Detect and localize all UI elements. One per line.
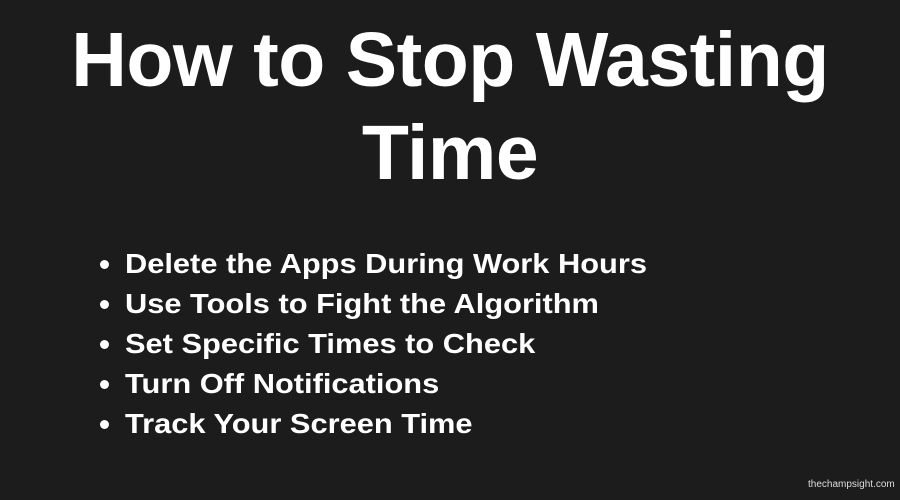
bullet list: Use Tools to Fight the Algorithm [125, 288, 599, 319]
title: How to Stop Wasting [71, 17, 829, 103]
bullet list: Set Specific Times to Check [125, 328, 535, 359]
bullet list: Track Your Screen Time [125, 408, 473, 439]
bullet list [100, 248, 647, 439]
watermark: thechampsight.com [808, 479, 895, 490]
bullet list: Turn Off Notifications [125, 368, 439, 399]
title [71, 17, 829, 196]
title: Time [362, 110, 538, 196]
bullet list: Delete the Apps During Work Hours [125, 248, 647, 279]
